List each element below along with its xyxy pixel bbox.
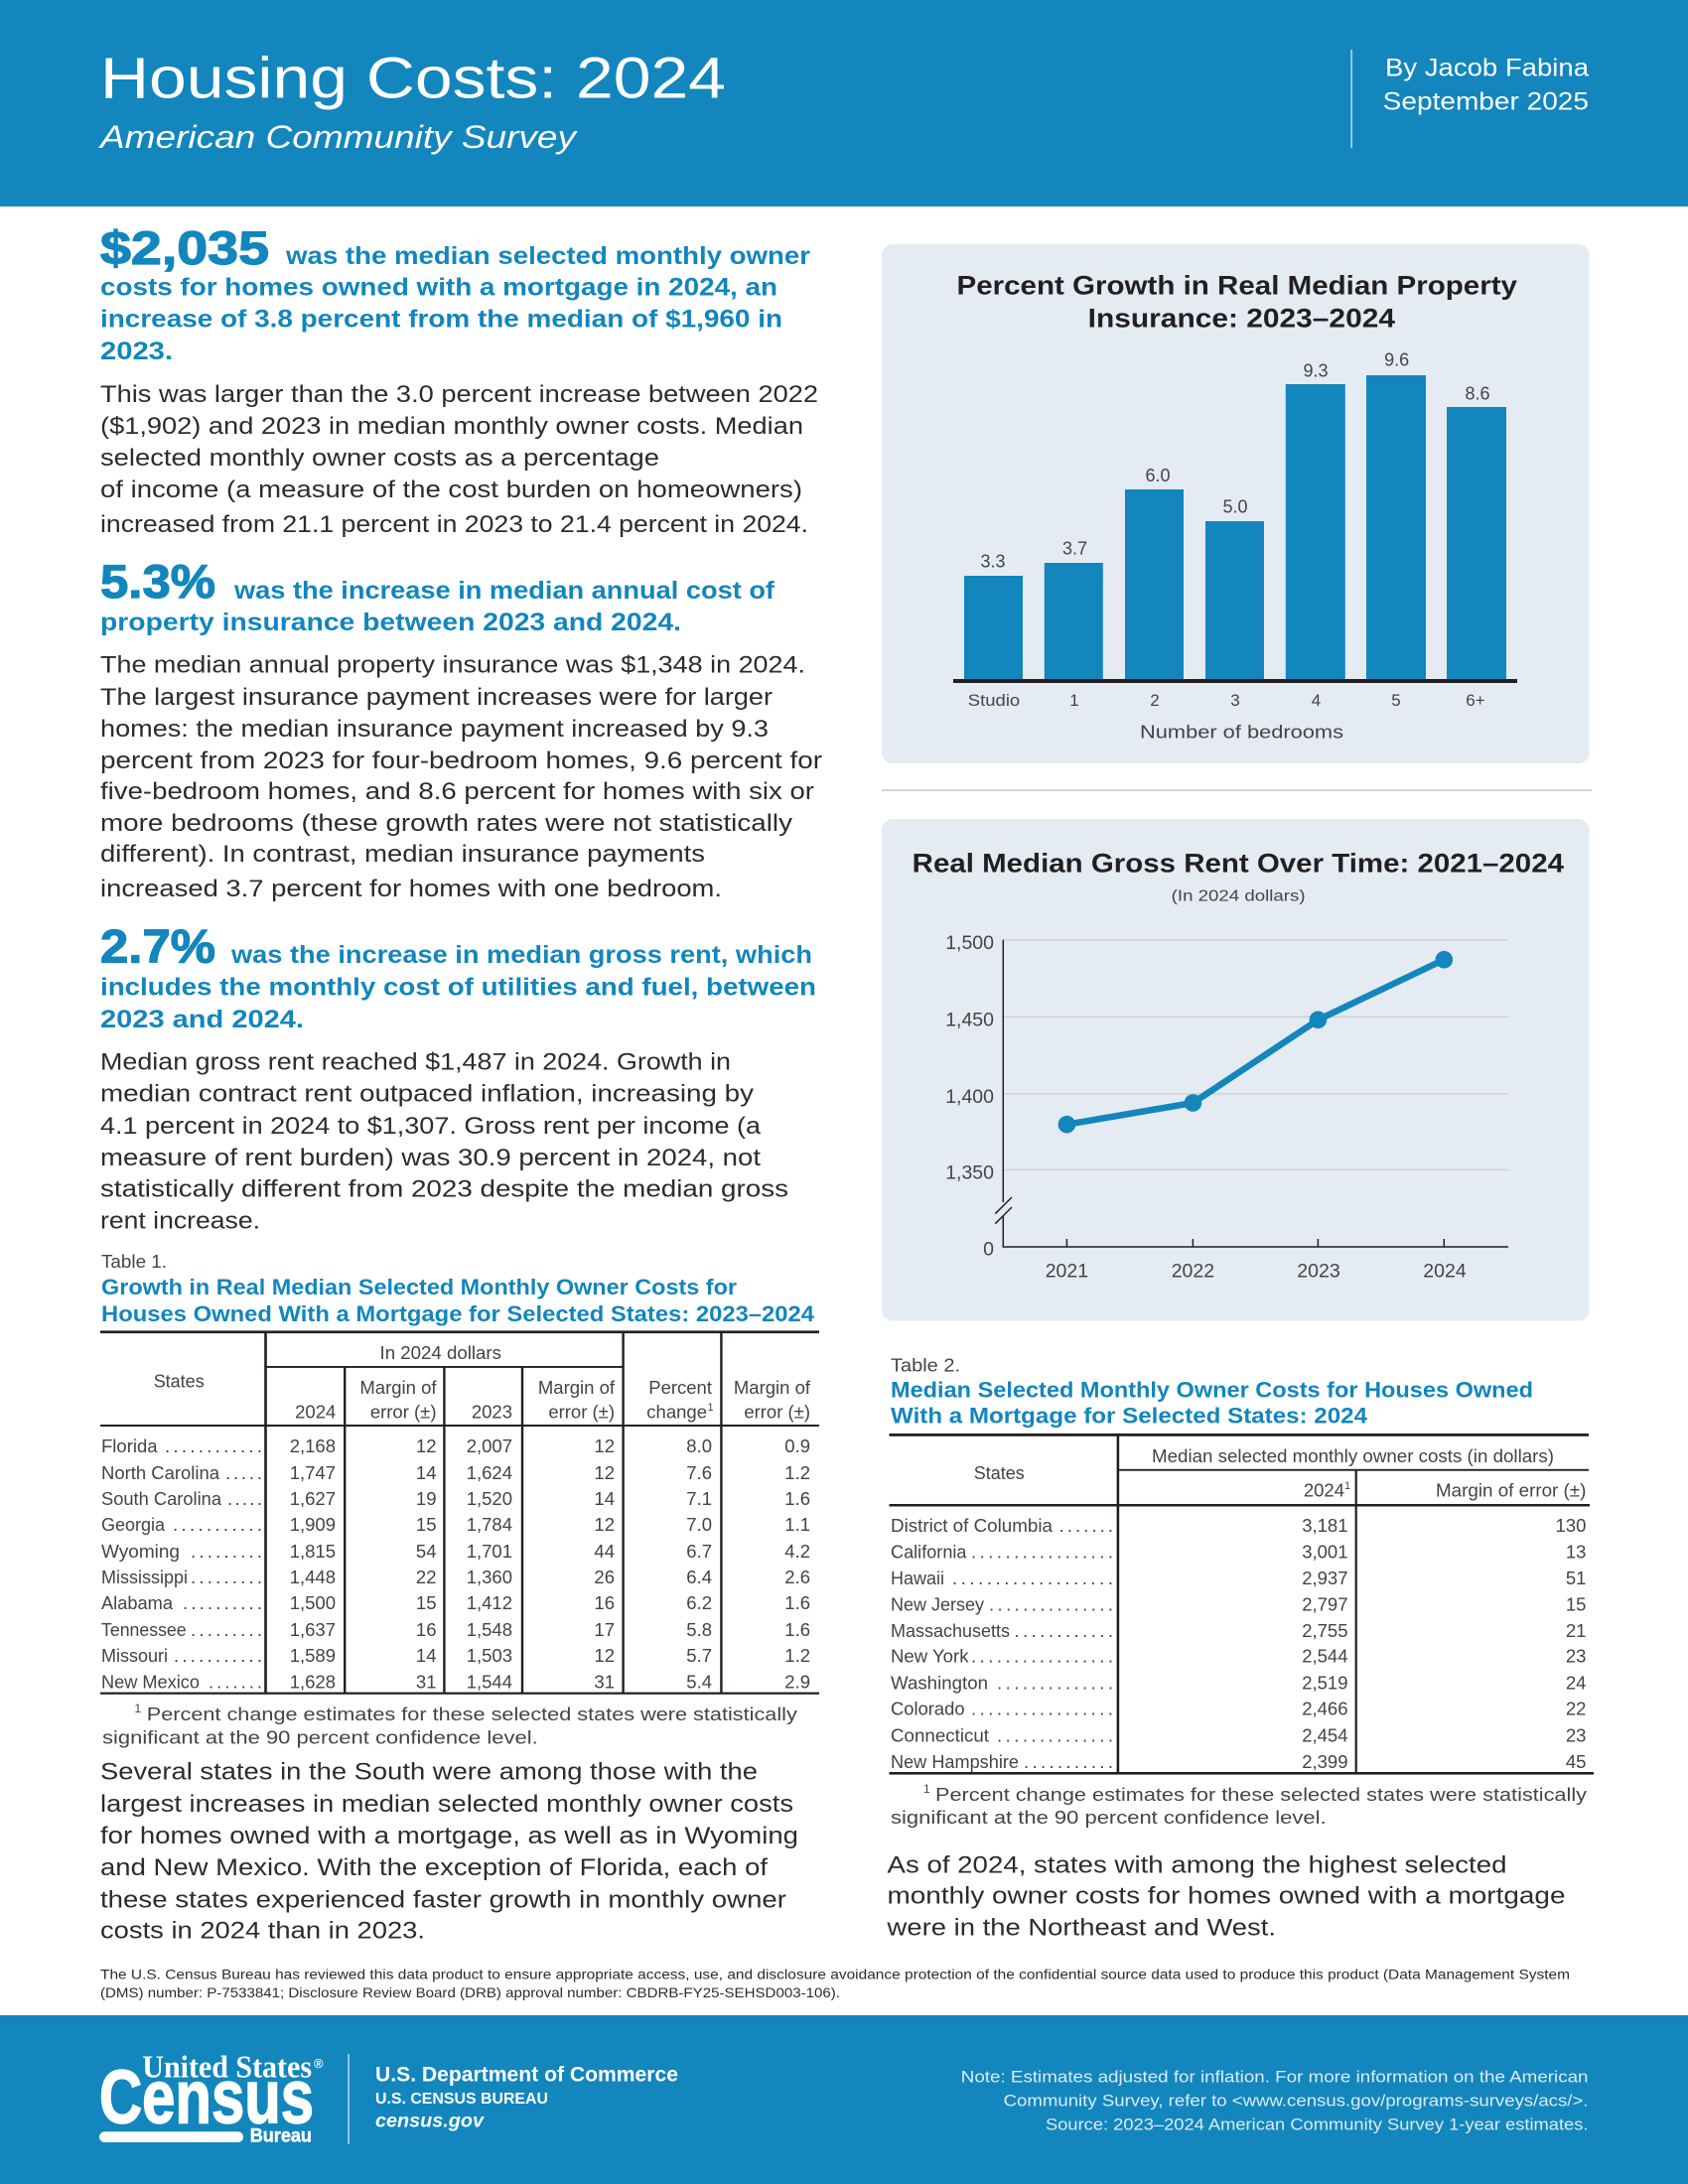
body paragraph: increased 3.7 percent for homes with one bedroom.	[100, 876, 722, 902]
table 1 rows: 1,503	[467, 1645, 512, 1666]
category labels: 6+	[1466, 691, 1485, 710]
table 2 rules	[890, 1433, 1594, 1775]
table 1 rows: 12	[594, 1462, 615, 1483]
disclosure statement: The U.S. Census Bureau has reviewed this data product to ensure appropriate access, use, and disclosure avoidance protection of the confidential source data used to produce this product (Data Management System	[100, 1966, 1570, 1981]
chart title: Insurance: 2023–2024	[1088, 304, 1395, 334]
table 1 rows: 1.6	[784, 1592, 810, 1613]
closing paragraph: left: and New Mexico. With the exception of Florida, each of	[100, 1854, 768, 1881]
highlight text: increase of 3.8 percent from the median of $1,960 in	[100, 306, 782, 334]
table 2 rows: 45	[1566, 1751, 1586, 1772]
table 1 rows: 5.4	[686, 1672, 712, 1693]
body paragraph	[100, 1048, 788, 1235]
body paragraph: measure of rent burden) was 30.9 percent in 2024, not	[100, 1145, 761, 1171]
table 1 header: 2024	[295, 1401, 336, 1422]
table 2 rows: 130	[1556, 1515, 1586, 1536]
body paragraph: homes: the median insurance payment increased by 9.3	[100, 716, 769, 743]
table 1 rows: 2,007	[467, 1435, 512, 1456]
census logo: ®	[314, 2056, 324, 2071]
table 1 header: error (±)	[548, 1401, 615, 1422]
category labels: 3	[1230, 691, 1240, 710]
census logo: United States	[142, 2048, 312, 2084]
disclosure statement: (DMS) number: P-7533841; Disclosure Review Board (DRB) approval number: CBDRB-FY25-SEHSD003-106).	[100, 1984, 840, 2000]
highlight text	[100, 941, 816, 1033]
table 1 rules	[100, 1330, 819, 1695]
closing paragraph: left: for homes owned with a mortgage, as well as in Wyoming	[100, 1823, 798, 1849]
closing paragraph: right: were in the Northeast and West.	[886, 1915, 1276, 1942]
table 1 rows: 7.0	[686, 1514, 712, 1535]
category labels: 5	[1391, 691, 1401, 710]
value labels: 9.6	[1384, 349, 1409, 369]
table 1 header: In 2024 dollars	[379, 1342, 501, 1363]
axis baseline	[953, 679, 1517, 683]
table 1 rows: 1,544	[467, 1672, 512, 1693]
table 1 rows: 1.6	[784, 1488, 810, 1509]
panel: property insurance bar chart	[882, 244, 1590, 763]
bars	[964, 375, 1506, 680]
highlight text: costs for homes owned with a mortgage in 2024, an	[100, 274, 777, 302]
table 2 title: Median Selected Monthly Owner Costs for Houses Owned	[891, 1378, 1533, 1402]
highlight text: was the median selected monthly owner	[285, 242, 810, 270]
table 1 rows: 16	[594, 1592, 615, 1613]
section: owner costs	[100, 221, 818, 538]
table 1 rows: South Carolina	[101, 1488, 222, 1509]
table 1 rows: 1,909	[290, 1514, 336, 1535]
big number 5.3%: 5.3%	[100, 555, 215, 608]
table 2 header	[974, 1445, 1586, 1501]
table 1 rows: . . . . . . . . . .	[183, 1592, 262, 1613]
disclosure statement	[100, 1966, 1570, 2000]
table 1 rows: 1,628	[290, 1672, 336, 1693]
table 1 rows: 1,747	[290, 1462, 336, 1483]
table 2 footnote	[891, 1782, 1588, 1828]
table 2 rows: 2,454	[1302, 1725, 1348, 1746]
category labels: 2	[1150, 691, 1160, 710]
body paragraph: Median gross rent reached $1,487 in 2024. Growth in	[100, 1048, 731, 1076]
y axis labels: 1,400	[945, 1086, 994, 1108]
table 2 rows: 2,544	[1302, 1646, 1348, 1667]
x axis labels: 2022	[1172, 1261, 1214, 1283]
table 2 rows: Colorado	[891, 1699, 965, 1719]
header divider	[1350, 50, 1352, 148]
table 1 rows: 1,589	[290, 1645, 336, 1666]
table 2 rows: . . . . . . . . . . . . . . .	[989, 1594, 1113, 1615]
body paragraph: five-bedroom homes, and 8.6 percent for homes with six or	[100, 778, 814, 805]
closing paragraph: left: largest increases in median selected monthly owner costs	[100, 1791, 793, 1818]
rent line with markers	[1058, 951, 1453, 1133]
table 1 rows: 6.2	[686, 1592, 712, 1613]
table 2 rows: New York	[891, 1646, 969, 1667]
table 1 rows: 1.6	[784, 1619, 810, 1640]
table 2 rows: California	[891, 1542, 967, 1563]
body paragraph: percent from 2023 for four-bedroom homes, 9.6 percent for	[100, 748, 822, 774]
department text: U.S. Department of Commerce	[375, 2064, 678, 2087]
table 1 rows: . . . . . . . . .	[191, 1567, 262, 1587]
table 1 footnote: 1	[135, 1702, 141, 1715]
table 1 rows: 19	[416, 1488, 437, 1509]
table 2 title	[891, 1378, 1533, 1429]
body paragraph: different). In contrast, median insurance payments	[100, 841, 705, 868]
source note	[961, 2069, 1589, 2134]
table 2 rows: . . . . . . . . . . . . . .	[997, 1673, 1113, 1694]
table 1 footnote: significant at the 90 percent confidence level.	[102, 1727, 538, 1747]
value labels: 8.6	[1465, 383, 1490, 403]
table 1 rows: 12	[416, 1435, 437, 1456]
category labels	[968, 691, 1485, 710]
table 1 title	[101, 1275, 815, 1326]
table 1 rows	[101, 1435, 810, 1693]
body paragraph: of income (a measure of the cost burden on homeowners)	[100, 477, 802, 503]
table 1 rows: 1,701	[467, 1541, 512, 1562]
y axis labels: 1,500	[945, 932, 994, 954]
table 1 rows: 1,815	[290, 1541, 336, 1562]
table 1 rows: 54	[416, 1541, 437, 1562]
table 1 rows: 15	[416, 1514, 437, 1535]
table 1 rows: Tennessee	[101, 1619, 187, 1640]
table 1 header: error (±)	[370, 1401, 437, 1422]
department text: census.gov	[375, 2111, 485, 2132]
table 1 rows: . . . . . . .	[209, 1672, 262, 1693]
axes	[995, 940, 1508, 1247]
table 1 header: Margin of	[734, 1377, 811, 1398]
table 1 rows: . . . . . . . . .	[191, 1541, 262, 1562]
panel: gross rent line chart	[882, 819, 1590, 1320]
table 1 footnote: Percent change estimates for these selected states were statistically	[147, 1704, 798, 1724]
category labels: 1	[1069, 691, 1079, 710]
table 2 rows: 2,466	[1302, 1699, 1348, 1719]
table 1 rows: 7.1	[686, 1488, 712, 1509]
table 1 rows: 1,360	[467, 1567, 512, 1587]
body paragraph: ($1,902) and 2023 in median monthly owner costs. Median	[100, 413, 803, 440]
table 1 rows: . . . . .	[225, 1462, 262, 1483]
title: Housing Costs: 2024	[100, 46, 726, 111]
y axis labels: 1,450	[945, 1009, 994, 1030]
table 1 rows: 1,784	[467, 1514, 512, 1535]
table 1 rows: 44	[594, 1541, 615, 1562]
table 2 rows: . . . . . . . . . . . . . . . . . . .	[952, 1568, 1113, 1588]
table 1 rows: 17	[594, 1619, 615, 1640]
highlight text	[100, 242, 810, 365]
source note: Source: 2023–2024 American Community Survey 1-year estimates.	[1046, 2116, 1589, 2134]
table 1 header	[154, 1342, 811, 1422]
chart title: Real Median Gross Rent Over Time: 2021–2024	[913, 849, 1564, 879]
source note: Note: Estimates adjusted for inflation. For more information on the American	[961, 2069, 1589, 2087]
body paragraph: more bedrooms (these growth rates were not statistically	[100, 810, 793, 837]
table 2 rows: 22	[1566, 1699, 1586, 1719]
table 2 rows: New Jersey	[891, 1594, 985, 1615]
x axis labels: 2021	[1046, 1261, 1088, 1283]
table 1 rows: 1,412	[467, 1592, 512, 1613]
chart title: Percent Growth in Real Median Property	[957, 270, 1517, 300]
highlight text: property insurance between 2023 and 2024.	[100, 609, 681, 636]
highlight text: 2023.	[100, 338, 173, 365]
closing paragraph: left: costs in 2024 than in 2023.	[100, 1918, 425, 1944]
table 1 title: Houses Owned With a Mortgage for Selected States: 2023–2024	[101, 1301, 815, 1326]
table 1 rows: 12	[594, 1645, 615, 1666]
table 2 rows: 3,181	[1302, 1515, 1348, 1536]
table 1 rows: 4.2	[784, 1541, 810, 1562]
closing paragraph: right: As of 2024, states with among the highest selected	[888, 1852, 1507, 1878]
table 2 rows: 21	[1566, 1620, 1586, 1641]
table 1 rows: 1,627	[290, 1488, 336, 1509]
table 1 rows: 14	[416, 1462, 437, 1483]
table 2 rows: 3,001	[1302, 1542, 1348, 1563]
table 2 rows: Connecticut	[891, 1725, 989, 1746]
table 1 rows: 2.9	[784, 1672, 810, 1693]
table 1 rows: 31	[416, 1672, 437, 1693]
table 1 header: error (±)	[744, 1401, 810, 1422]
table 2 rows: . . . . . . . . . . . . . . . . .	[971, 1699, 1113, 1719]
census logo: Bureau	[250, 2125, 312, 2147]
value labels: 5.0	[1222, 496, 1248, 516]
department text: U.S. CENSUS BUREAU	[375, 2091, 548, 2108]
table 1 rows: Florida	[101, 1435, 158, 1456]
table 1 rows: 16	[416, 1619, 437, 1640]
table 1 rows: 2.6	[784, 1567, 810, 1587]
table 1 rows: 15	[416, 1592, 437, 1613]
footer divider	[348, 2054, 350, 2144]
chart title	[957, 270, 1517, 334]
table 1 footnote	[102, 1702, 798, 1747]
table 1 rows: 14	[594, 1488, 615, 1509]
closing paragraph: left: these states experienced faster growth in monthly owner	[100, 1886, 786, 1914]
table 2 rows: 15	[1566, 1594, 1586, 1615]
closing paragraph: right	[886, 1852, 1565, 1942]
table 1 rows: 2,168	[290, 1435, 336, 1456]
table 2 rows: District of Columbia	[891, 1515, 1054, 1536]
table 1 label: Table 1.	[101, 1251, 167, 1272]
value labels: 3.7	[1062, 538, 1087, 558]
table 2 rows: 2,937	[1302, 1568, 1348, 1588]
section: property insurance	[100, 555, 822, 902]
closing paragraph: right: monthly owner costs for homes owned with a mortgage	[888, 1882, 1565, 1909]
y axis labels: 0	[983, 1238, 994, 1260]
table 2 rows: 2,519	[1302, 1673, 1348, 1694]
table 2 rows: . . . . . . .	[1059, 1515, 1113, 1536]
table 1 title: Growth in Real Median Selected Monthly Owner Costs for	[101, 1275, 737, 1299]
table 1 rows: 6.4	[686, 1567, 712, 1587]
table 1 rows: 1,448	[290, 1567, 336, 1587]
table 2 rows: . . . . . . . . . . . . . . . . .	[971, 1646, 1113, 1667]
table 1 header: 1	[707, 1402, 714, 1414]
table 2 title: With a Mortgage for Selected States: 2024	[891, 1404, 1368, 1429]
table 2 rows: 2,399	[1302, 1751, 1348, 1772]
highlight text: was the increase in median annual cost of	[233, 577, 775, 605]
table 1 rows: 6.7	[686, 1541, 712, 1562]
table 1 rows: . . . . . . . . .	[191, 1619, 262, 1640]
highlight text: was the increase in median gross rent, which	[230, 941, 812, 969]
table 1 rows: . . . . . . . . . . . .	[165, 1435, 262, 1456]
closing paragraph: left: Several states in the South were among those with the	[100, 1759, 758, 1785]
body paragraph: 4.1 percent in 2024 to $1,307. Gross rent per income (a	[100, 1113, 761, 1140]
census logo: Census	[99, 2055, 314, 2140]
table 2 rows: . . . . . . . . . . . .	[1015, 1620, 1113, 1641]
value labels: 6.0	[1145, 466, 1171, 485]
table 1 header: States	[154, 1371, 205, 1392]
table 2 rows: 13	[1566, 1542, 1586, 1563]
footer banner	[0, 2015, 1688, 2184]
table 1 rows: 31	[594, 1672, 615, 1693]
grid lines	[1003, 939, 1508, 1170]
table 2 rows	[891, 1515, 1586, 1772]
table 2 rows: . . . . . . . . . . . . . . . . .	[971, 1542, 1113, 1563]
table 1 rows: 1.1	[784, 1514, 810, 1535]
big number 2.7%: 2.7%	[100, 919, 215, 973]
body paragraph: statistically different from 2023 despite the median gross	[100, 1175, 788, 1203]
table 1 header: Percent	[648, 1377, 712, 1398]
table 2 rows: Washington	[891, 1673, 988, 1694]
category labels: Studio	[968, 691, 1020, 710]
body paragraph: rent increase.	[100, 1207, 260, 1235]
table 1 rows: 12	[594, 1514, 615, 1535]
table 1 rows: 14	[416, 1645, 437, 1666]
department text	[375, 2064, 678, 2132]
table 1	[100, 1251, 819, 1747]
table 1 rows: . . . . . . . . . . .	[173, 1514, 262, 1535]
table 2 header: 2024	[1304, 1480, 1344, 1501]
source note: Community Survey, refer to <www.census.gov/programs-surveys/acs/>.	[1004, 2093, 1589, 2111]
table 2 footnote: significant at the 90 percent confidence level.	[891, 1807, 1327, 1828]
table 2 rows: . . . . . . . . . . .	[1024, 1751, 1113, 1772]
table 1 rows: 1,500	[290, 1592, 336, 1613]
chart subtitle: (In 2024 dollars)	[1172, 887, 1306, 904]
header banner	[0, 0, 1688, 206]
table 1 rows: 1.2	[784, 1645, 810, 1666]
value labels: 9.3	[1303, 361, 1329, 381]
table 1 rows: 1,520	[467, 1488, 512, 1509]
table 2 rows: 51	[1566, 1568, 1586, 1588]
author: By Jacob Fabina	[1385, 55, 1589, 82]
table 1 rows: . . . . . . . . . . .	[174, 1645, 262, 1666]
table 2 label: Table 2.	[891, 1354, 960, 1376]
category labels: 4	[1312, 691, 1321, 710]
table 1 rows: 1,548	[467, 1619, 512, 1640]
table 2 rows: 23	[1566, 1725, 1586, 1746]
table 1 rows: 1,624	[467, 1462, 512, 1483]
body paragraph: This was larger than the 3.0 percent increase between 2022	[100, 381, 818, 408]
table 2 rows: Hawaii	[891, 1568, 944, 1588]
table 2 rows: New Hampshire	[891, 1751, 1019, 1772]
x axis labels: 2024	[1423, 1261, 1467, 1283]
highlight text: 2023 and 2024.	[100, 1006, 304, 1033]
table 2 header: 1	[1344, 1480, 1350, 1492]
subtitle: American Community Survey	[98, 119, 578, 155]
table 2 footnote: Percent change estimates for these selected states were statistically	[935, 1784, 1588, 1805]
axis title: Number of bedrooms	[1140, 721, 1343, 742]
x axis labels: 2023	[1297, 1261, 1340, 1283]
value labels: 3.3	[980, 552, 1006, 572]
table 1 rows: 0.9	[784, 1435, 810, 1456]
table 1 rows: Alabama	[101, 1592, 174, 1613]
table 1 header: Margin of	[538, 1377, 616, 1398]
table 2 footnote: 1	[923, 1782, 930, 1796]
body paragraph: The largest insurance payment increases were for larger	[100, 684, 773, 711]
body paragraph	[100, 651, 822, 902]
table 1 rows: 8.0	[686, 1435, 712, 1456]
highlight text: includes the monthly cost of utilities and fuel, between	[100, 973, 816, 1001]
section: gross rent	[100, 919, 816, 1235]
body paragraph: selected monthly owner costs as a percentage	[100, 445, 659, 472]
body paragraph: increased from 21.1 percent in 2023 to 21.4 percent in 2024.	[100, 511, 808, 538]
y axis labels	[945, 932, 994, 1260]
table 1 rows: Wyoming	[101, 1541, 180, 1562]
table 1 rows: Missouri	[101, 1645, 168, 1666]
table 1 rows: 1.2	[784, 1462, 810, 1483]
y axis labels: 1,350	[945, 1162, 994, 1184]
highlight text	[100, 577, 775, 636]
table 2 header: Median selected monthly owner costs (in dollars)	[1152, 1445, 1554, 1466]
x axis labels	[1046, 1261, 1467, 1283]
date: September 2025	[1383, 88, 1589, 116]
table 1 rows: 1,637	[290, 1619, 336, 1640]
table 1 rows: 7.6	[686, 1462, 712, 1483]
table 1 rows: North Carolina	[101, 1462, 220, 1483]
big number $2,035: $2,035	[100, 221, 269, 274]
table 1 header: change	[646, 1401, 707, 1422]
table 1 rows: . . . . .	[227, 1488, 262, 1509]
table 1 rows: 5.7	[686, 1645, 712, 1666]
body paragraph: median contract rent outpaced inflation, increasing by	[100, 1080, 755, 1108]
table 2	[890, 1354, 1594, 1828]
body paragraph	[100, 381, 818, 538]
table 1 rows: 22	[416, 1567, 437, 1587]
table 2 rows: 23	[1566, 1646, 1586, 1667]
closing paragraph: left	[100, 1759, 798, 1944]
body paragraph: The median annual property insurance was $1,348 in 2024.	[100, 651, 805, 679]
table 1 rows: New Mexico	[101, 1672, 200, 1693]
table 1 rows: Mississippi	[101, 1567, 188, 1587]
table 2 header: Margin of error (±)	[1436, 1480, 1586, 1501]
table 2 header: States	[974, 1462, 1025, 1483]
value labels	[980, 349, 1490, 572]
table 2 rows: 24	[1566, 1673, 1586, 1694]
table 1 header: Margin of	[359, 1377, 437, 1398]
table 1 header: 2023	[472, 1401, 512, 1422]
table 2 rows: 2,755	[1302, 1620, 1348, 1641]
table 2 rows: . . . . . . . . . . . . . .	[997, 1725, 1113, 1746]
table 1 rows: 12	[594, 1435, 615, 1456]
table 1 rows: 5.8	[686, 1619, 712, 1640]
table 2 rows: Massachusetts	[891, 1620, 1010, 1641]
table 1 rows: Georgia	[101, 1514, 166, 1535]
table 1 rows: 26	[594, 1567, 615, 1587]
table 2 rows: 2,797	[1302, 1594, 1348, 1615]
